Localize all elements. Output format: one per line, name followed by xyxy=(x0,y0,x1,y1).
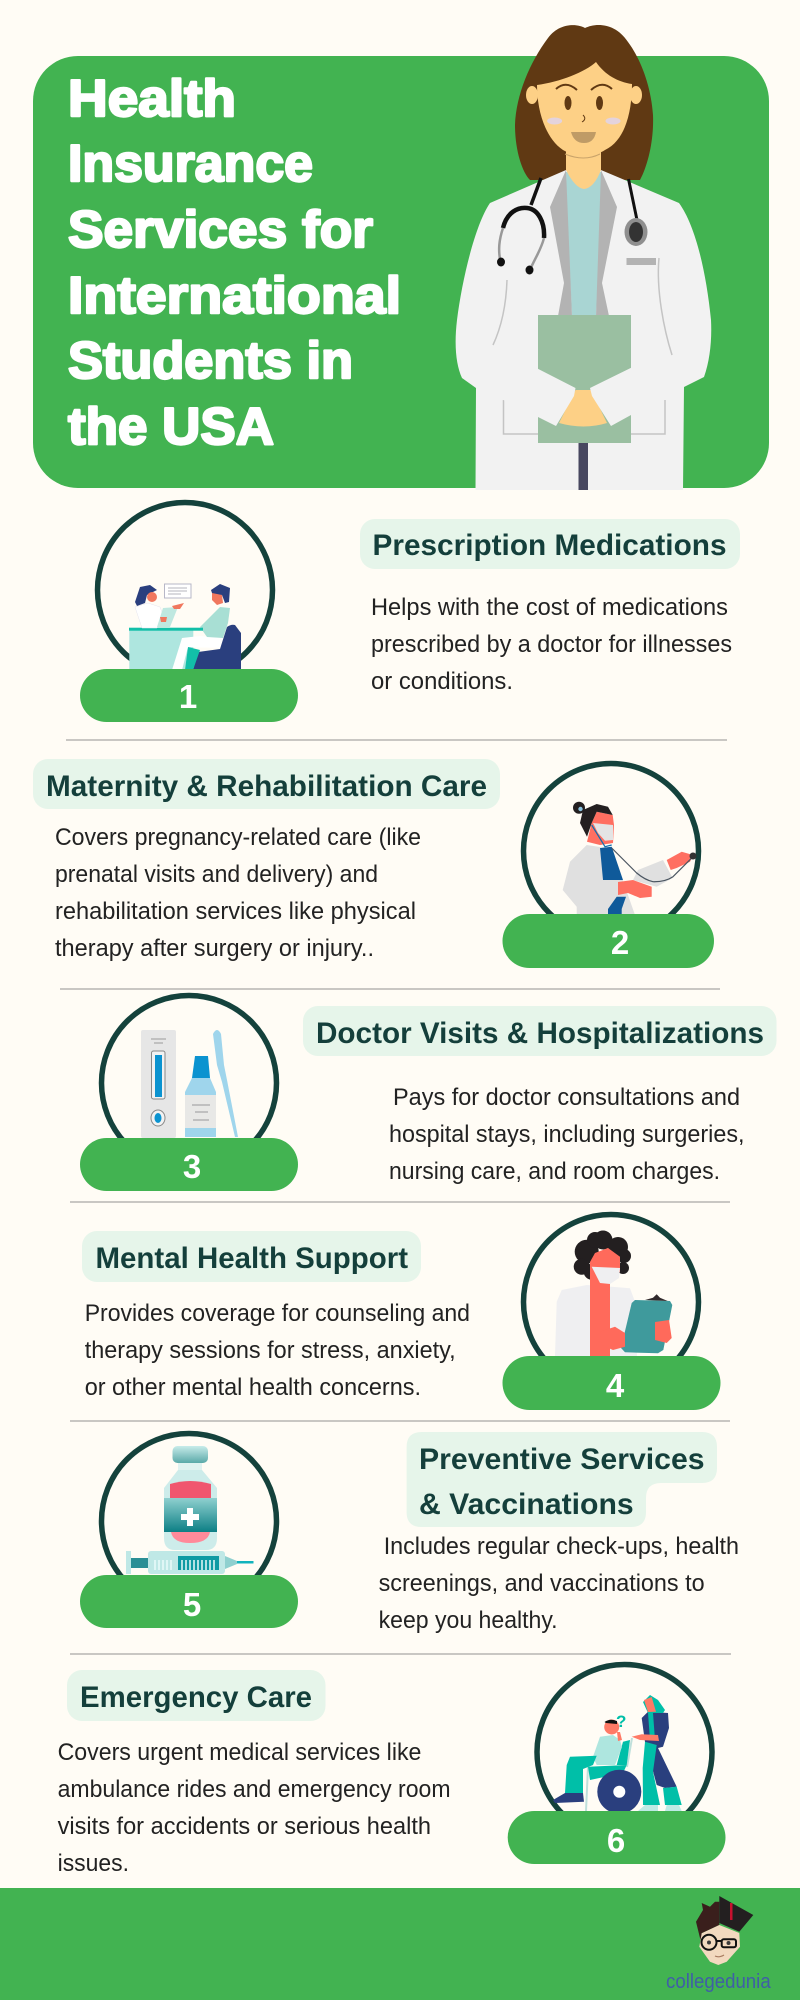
text block: rehabilitation services like physical xyxy=(55,898,416,925)
section 1: prescription medications xyxy=(80,502,740,722)
number pill 5: 5 xyxy=(183,1586,201,1623)
title xyxy=(68,70,401,456)
text block: Provides coverage for counseling and xyxy=(85,1300,470,1327)
text block: or conditions. xyxy=(371,668,513,695)
section 4: mental health support xyxy=(82,1214,720,1410)
number pill 6 xyxy=(508,1811,726,1864)
text block xyxy=(58,1739,450,1877)
text block: issues. xyxy=(58,1850,129,1877)
text block: ambulance rides and emergency room xyxy=(58,1776,450,1803)
text block: Helps with the cost of medications xyxy=(371,594,728,621)
title: International xyxy=(68,267,401,325)
text block xyxy=(371,594,732,695)
text block: therapy after surgery or injury.. xyxy=(55,935,374,962)
heading xyxy=(67,1670,326,1721)
number pill 1 xyxy=(80,669,298,722)
icon: test kit and bottle in circle xyxy=(102,996,276,1170)
text block: or other mental health concerns. xyxy=(85,1374,421,1401)
number pill 2: 2 xyxy=(611,924,629,961)
text block: prescribed by a doctor for illnesses xyxy=(371,631,732,658)
title: the USA xyxy=(68,398,274,456)
section 6: emergency care xyxy=(58,1664,726,1877)
text block: visits for accidents or serious health xyxy=(58,1813,431,1840)
heading xyxy=(303,1006,776,1056)
text block: nursing care, and room charges. xyxy=(389,1158,720,1185)
heading: Mental Health Support xyxy=(96,1242,408,1275)
heading: Prescription Medications xyxy=(372,529,726,562)
number pill 6: 6 xyxy=(607,1822,625,1859)
section 5: preventive services and vaccinations xyxy=(80,1432,739,1634)
text block: Pays for doctor consultations and xyxy=(393,1084,740,1111)
text block: therapy sessions for stress, anxiety, xyxy=(85,1337,456,1364)
heading: Emergency Care xyxy=(80,1681,312,1714)
icon: doctor consultation in circle xyxy=(98,502,272,678)
text block xyxy=(389,1084,744,1185)
text block xyxy=(379,1533,739,1634)
heading: Maternity & Rehabilitation Care xyxy=(46,770,487,803)
number pill 5 xyxy=(80,1575,298,1628)
text block xyxy=(55,824,421,962)
icon: vial and syringe in circle xyxy=(102,1434,276,1608)
text block: screenings, and vaccinations to xyxy=(379,1570,705,1597)
text block: keep you healthy. xyxy=(379,1607,558,1634)
section 3: doctor visits and hospitalizations xyxy=(80,996,776,1191)
text block: prenatal visits and delivery) and xyxy=(55,861,378,888)
hero panel xyxy=(33,25,769,490)
text block: hospital stays, including surgeries, xyxy=(389,1121,744,1148)
number pill 3: 3 xyxy=(183,1148,201,1185)
heading: Doctor Visits & Hospitalizations xyxy=(316,1017,764,1050)
title: Health xyxy=(68,70,236,128)
heading: & Vaccinations xyxy=(419,1488,634,1521)
number pill 2 xyxy=(502,914,714,968)
logo mascot xyxy=(696,1896,753,1965)
title: Insurance xyxy=(68,135,313,193)
icon: nurse with wheelchair patient in circle xyxy=(537,1664,712,1840)
heading xyxy=(82,1231,421,1282)
title: Students in xyxy=(68,332,353,390)
heading xyxy=(407,1432,717,1527)
text block: Includes regular check-ups, health xyxy=(384,1533,739,1560)
text block: Covers pregnancy-related care (like xyxy=(55,824,421,851)
text block: Covers urgent medical services like xyxy=(58,1739,421,1766)
text block xyxy=(85,1300,470,1401)
icon: doctor with clipboard in circle xyxy=(524,1214,698,1390)
footer band xyxy=(0,1888,800,2000)
icon: doctor with stethoscope in circle xyxy=(524,764,698,938)
heading xyxy=(33,759,500,809)
number pill 4: 4 xyxy=(606,1367,625,1404)
logo wordmark: collegedunia xyxy=(666,1971,772,1993)
heading: Preventive Services xyxy=(419,1443,705,1476)
icon: nurse with wheelchair patient in circle: ? xyxy=(616,1712,626,1731)
title: Services for xyxy=(68,201,373,259)
number pill 3 xyxy=(80,1138,298,1191)
section 2: maternity and rehabilitation care xyxy=(33,759,714,968)
number pill 1: 1 xyxy=(179,678,197,715)
illustration: doctor with stethoscope xyxy=(456,25,711,490)
heading xyxy=(360,519,740,569)
number pill 4 xyxy=(502,1356,720,1410)
